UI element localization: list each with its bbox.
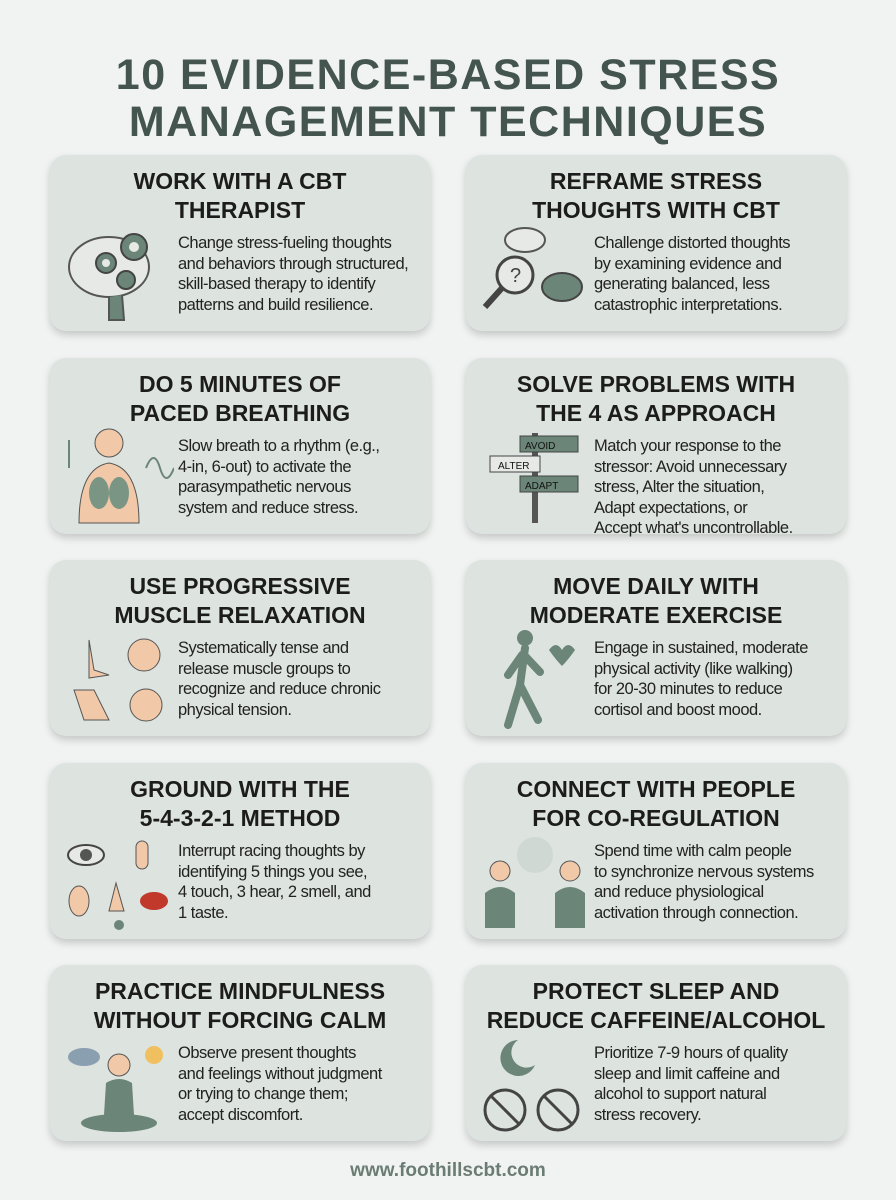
icon: senses [67,840,168,930]
panel: co-regulation: FOR CO-REGULATION [532,805,780,831]
icon: brain gears [68,233,150,321]
panel: sleep: stress recovery. [594,1106,701,1124]
panel: CBT therapist: Change stress-fueling thoughts [178,234,391,252]
panel: PMR: Systematically tense and [178,639,349,657]
panel: reframe thoughts: THOUGHTS WITH CBT [532,197,780,223]
panel: mindfulness [50,965,430,1141]
panel: 4 As: Adapt expectations, or [594,498,747,516]
icon: moon and no-cups [484,1040,580,1132]
panel: sleep [466,965,846,1141]
icon: magnifier and clouds [482,227,583,309]
icon: magnifier and clouds: ? [510,265,521,287]
panel: exercise: MODERATE EXERCISE [530,602,782,628]
panel: exercise: physical activity (like walking) [594,660,793,678]
panel: reframe thoughts: catastrophic interpretations. [594,296,782,314]
panel: reframe thoughts [466,155,846,331]
panel: co-regulation: Spend time with calm people [594,842,791,860]
panel: exercise: cortisol and boost mood. [594,700,762,718]
title: MANAGEMENT TECHNIQUES [129,98,767,146]
panel: PMR: MUSCLE RELAXATION [114,602,366,628]
panel: paced breathing: 4-in, 6-out) to activate the [178,458,351,476]
title [116,51,780,146]
panel: 4 As: Match your response to the [594,437,781,455]
panel: exercise: for 20-30 minutes to reduce [594,680,782,698]
panel: 4 As: THE 4 AS APPROACH [536,400,776,426]
panel: grounding: 1 taste. [178,904,228,922]
panel: reframe thoughts: generating balanced, less [594,275,770,293]
panel: CBT therapist: and behaviors through structured, [178,254,408,272]
panel: sleep: PROTECT SLEEP AND [533,978,779,1004]
panel: grounding: 4 touch, 3 hear, 2 smell, and [178,883,371,901]
panel: CBT therapist: WORK WITH A CBT [134,168,346,194]
panel: mindfulness: PRACTICE MINDFULNESS [95,978,385,1004]
panel: reframe thoughts: Challenge distorted thoughts [594,234,790,252]
panel: sleep: REDUCE CAFFEINE/ALCOHOL [487,1007,825,1033]
icon: signpost: AVOID [525,441,555,452]
panel: 4 As: Accept what's uncontrollable. [594,519,793,537]
panel: 4 As: stress, Alter the situation, [594,478,764,496]
panel: co-regulation: to synchronize nervous systems [594,862,814,880]
panel: co-regulation [466,763,846,939]
icon: signpost: ALTER [498,461,530,472]
panel: exercise: Engage in sustained, moderate [594,639,808,657]
panel: PMR: recognize and reduce chronic [178,680,380,698]
panel: reframe thoughts: by examining evidence and [594,254,781,272]
icon: signpost: ADAPT [525,481,558,492]
panel: co-regulation: and reduce physiological [594,883,764,901]
panel: grounding: identifying 5 things you see, [178,862,367,880]
panel: co-regulation: activation through connection. [594,904,798,922]
panel: PMR: release muscle groups to [178,660,350,678]
panel: 4 As: stressor: Avoid unnecessary [594,458,787,476]
title: 10 EVIDENCE-BASED STRESS [116,51,780,99]
panel: sleep: alcohol to support natural [594,1085,766,1103]
panel: CBT therapist: patterns and build resilience. [178,296,373,314]
icon: two people [485,837,585,928]
panel: 4 As [466,358,846,534]
panel: 4 As: SOLVE PROBLEMS WITH [517,371,795,397]
panel: grounding: GROUND WITH THE [130,776,350,802]
panel: sleep: sleep and limit caffeine and [594,1064,780,1082]
panel: CBT therapist [50,155,430,331]
footer url: www.foothillscbt.com [350,1160,546,1181]
panel: mindfulness: or trying to change them; [178,1085,348,1103]
icon: signpost [490,433,578,523]
panel: exercise: MOVE DAILY WITH [553,573,759,599]
panel: exercise [466,560,846,736]
icon: walker with heart [504,630,575,729]
panel: grounding [50,763,430,939]
panel: paced breathing: DO 5 MINUTES OF [139,371,341,397]
panel: reframe thoughts: REFRAME STRESS [550,168,762,194]
panel: PMR: physical tension. [178,700,292,718]
panel: paced breathing: parasympathetic nervous [178,478,351,496]
icon: lungs figure [68,428,174,524]
panel: paced breathing: system and reduce stress. [178,498,358,516]
icon: meditating person [68,1046,163,1132]
panel: grounding: 5-4-3-2-1 METHOD [140,805,340,831]
panel: PMR: USE PROGRESSIVE [129,573,351,599]
panel: mindfulness: WITHOUT FORCING CALM [94,1007,386,1033]
panel: CBT therapist: skill-based therapy to identify [178,275,375,293]
panel: paced breathing [50,358,430,534]
panel: CBT therapist: THERAPIST [175,197,305,223]
panel: mindfulness: Observe present thoughts [178,1044,356,1062]
panel: PMR [50,560,430,736]
panel: mindfulness: accept discomfort. [178,1106,303,1124]
icon: feet and fists [73,638,162,722]
panel: co-regulation: CONNECT WITH PEOPLE [517,776,795,802]
panel: sleep: Prioritize 7-9 hours of quality [594,1044,788,1062]
panel: mindfulness: and feelings without judgment [178,1064,382,1082]
panel: paced breathing: PACED BREATHING [130,400,350,426]
panel: grounding: Interrupt racing thoughts by [178,842,365,860]
panel: paced breathing: Slow breath to a rhythm (e.g., [178,437,379,455]
